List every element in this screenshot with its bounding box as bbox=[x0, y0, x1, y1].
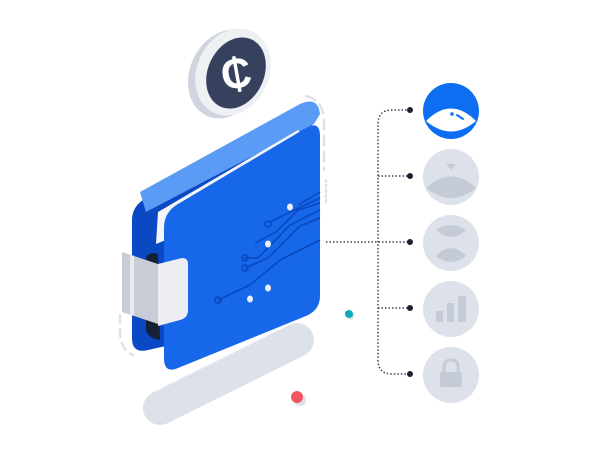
back panel bbox=[132, 110, 312, 351]
shadow under wallet bbox=[160, 340, 297, 408]
top edge light strip bbox=[140, 102, 320, 212]
icon: rotating eyes bbox=[423, 215, 479, 271]
clasp bbox=[122, 252, 188, 340]
circuit dots bbox=[247, 204, 293, 302]
coin bbox=[174, 16, 285, 131]
circuit lines bbox=[215, 192, 320, 303]
connector end dots bbox=[407, 107, 413, 377]
coin: ₵ bbox=[217, 48, 255, 99]
icon: lock bbox=[423, 347, 479, 403]
wallet bbox=[122, 102, 320, 370]
connector lines bbox=[326, 110, 410, 374]
icon: bar chart bbox=[423, 281, 479, 337]
red dot bbox=[291, 391, 306, 406]
icon: eye with arrow bbox=[423, 149, 479, 205]
dashed decoration lines bbox=[120, 96, 326, 355]
icon: eye (active) bbox=[423, 83, 479, 139]
teal dot bbox=[345, 310, 354, 320]
white paper bbox=[156, 130, 306, 244]
front panel bbox=[164, 125, 320, 370]
